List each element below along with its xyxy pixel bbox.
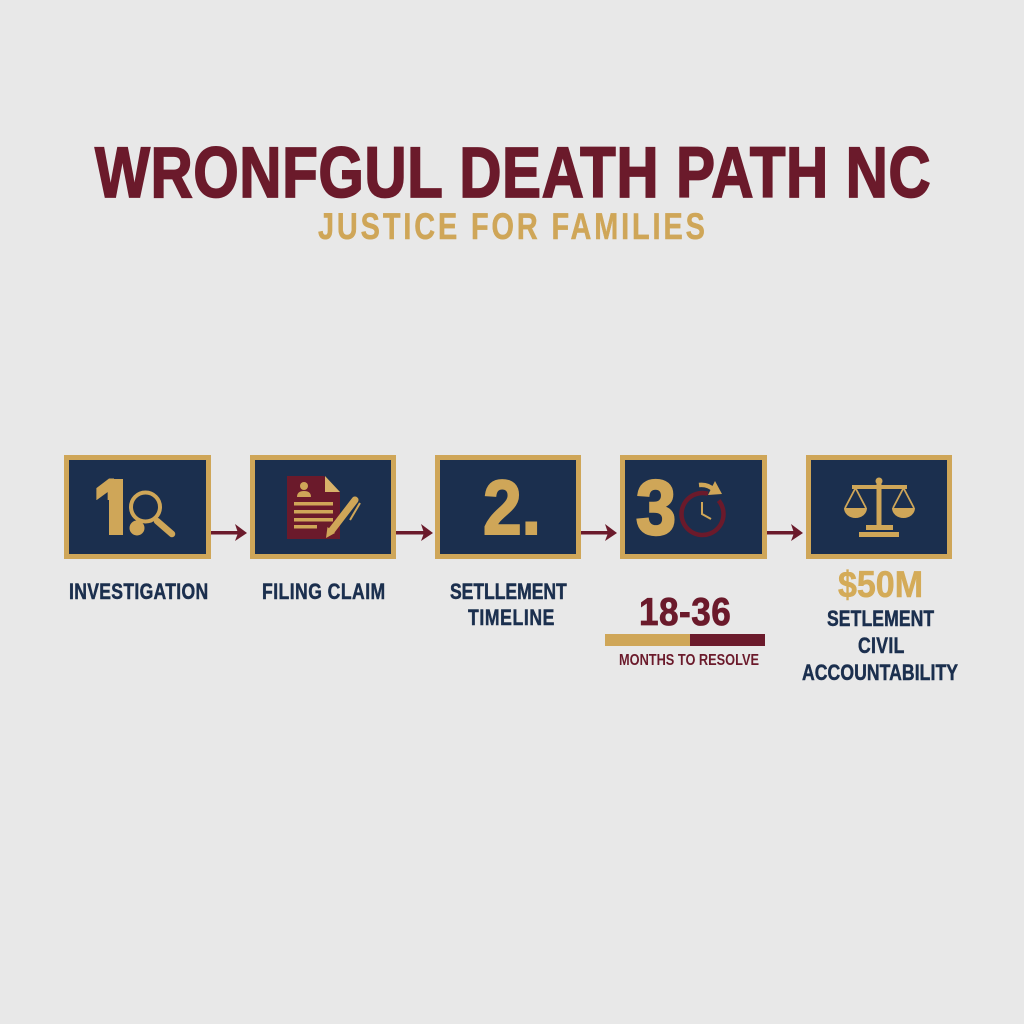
step 1 number: 1 [93, 463, 131, 552]
title: WRONFGUL DEATH PATH NC [95, 132, 931, 212]
panel: step 5 settlement [802, 458, 958, 686]
step 3 label [450, 580, 567, 631]
step 2 label: FILING CLAIM [262, 580, 385, 605]
icon: magnifying glass [130, 492, 172, 536]
icon: clock with arrow [682, 481, 724, 535]
arrow 2 to 3 [396, 524, 433, 541]
panel: step 3 settlement timeline [438, 458, 578, 631]
step 5 label: ACCOUNTABILITY [802, 661, 958, 686]
settlement amount: $50M [838, 564, 923, 605]
subtitle: JUSTICE FOR FAMILIES [318, 207, 705, 248]
arrow 1 to 2 [211, 524, 247, 541]
step 4 card [622, 458, 764, 556]
icon: claim document and pen [287, 476, 360, 539]
infographic canvas [64, 146, 958, 680]
step 2 card [252, 458, 394, 556]
step 1 card [66, 458, 208, 556]
icon: scales of justice [844, 478, 915, 537]
step number 2: 2. [483, 465, 541, 551]
arrow 4 to 5 [767, 524, 803, 541]
step 3 label: TIMELINE [468, 606, 554, 631]
panel: step 2 filing claim [252, 458, 394, 605]
arrow 3 to 4 [581, 524, 617, 541]
step 3 label: SETLLEMENT [450, 580, 567, 605]
panel: step 4 timeline [605, 458, 765, 669]
duration figure: 18-36 [639, 589, 731, 633]
step 5 label: CIVIL [858, 634, 904, 659]
step 5 card [808, 458, 950, 556]
panel: step 1 investigation [66, 458, 208, 605]
duration bar [605, 634, 765, 646]
step 1 number [96, 478, 123, 535]
step 5 label [802, 607, 958, 686]
duration caption: MONTHS TO RESOLVE [619, 652, 759, 669]
step 3 card [438, 458, 578, 556]
step 1 label: INVESTIGATION [69, 580, 208, 605]
step 5 label: SETLEMENT [827, 607, 934, 632]
step number 3: 3 [636, 465, 676, 551]
